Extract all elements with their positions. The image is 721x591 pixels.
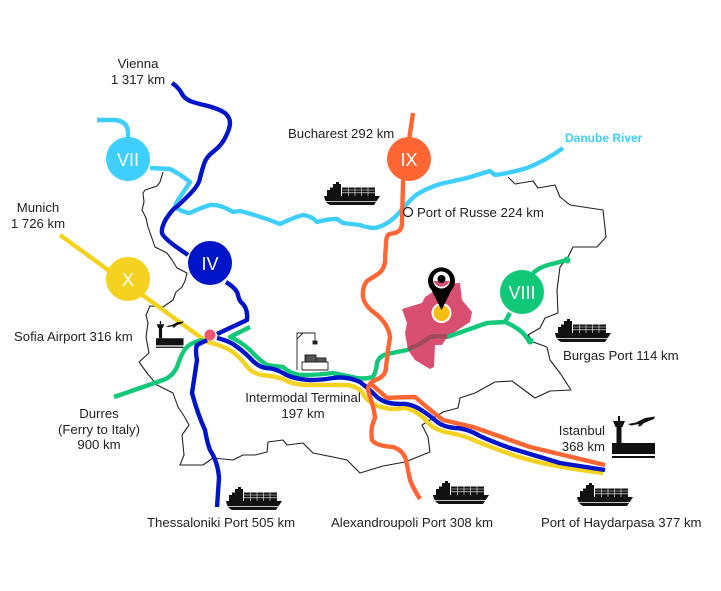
label: Durres: Durres xyxy=(79,406,119,421)
Sofia marker xyxy=(204,330,216,340)
label: Port of Russe: Port of Russe 224 km xyxy=(417,205,544,220)
label: Burgas Port: Burgas Port 114 km xyxy=(563,348,679,363)
label: Istanbul: Istanbul xyxy=(559,423,605,438)
icon: location pin xyxy=(428,267,455,323)
icon: intermodal crane xyxy=(297,333,328,370)
label: Thessaloniki Port: Thessaloniki Port 505 km xyxy=(147,515,295,530)
label: Durres: 900 km xyxy=(77,437,121,452)
badge IV: IV xyxy=(201,254,219,274)
region: highlighted province xyxy=(402,283,472,369)
Port of Russe marker xyxy=(404,208,412,216)
icon: ship Haydarpasa xyxy=(577,483,633,506)
badge IV xyxy=(188,241,232,285)
route VIII: green corridor xyxy=(114,256,570,397)
label: Vienna: 1 317 km xyxy=(111,72,165,87)
route VII: Danube River xyxy=(97,120,563,228)
label: Danube River: Danube River xyxy=(565,131,643,145)
icon: airport Sofia xyxy=(156,321,184,348)
route IX: orange corridor xyxy=(363,113,605,499)
badge IX: IX xyxy=(400,150,418,170)
label: Munich: Munich xyxy=(17,200,59,215)
icon: ship Black Sea north xyxy=(324,182,380,205)
label: Intermodal Terminal: 197 km xyxy=(281,406,325,421)
label: Alexandroupoli Port: Alexandroupoli Port 308 km xyxy=(331,515,493,530)
icon: ship Alexandroupoli xyxy=(433,481,489,504)
route segment: darkened green over province xyxy=(408,336,447,349)
badge X xyxy=(106,257,150,301)
badge VII: VII xyxy=(117,150,139,170)
label: Sofia Airport: Sofia Airport 316 km xyxy=(14,329,133,344)
label: Intermodal Terminal: Intermodal Terminal xyxy=(245,390,361,405)
badge X: X xyxy=(122,270,134,290)
label: Munich: 1 726 km xyxy=(11,216,65,231)
label: Port of Haydarpasa: Port of Haydarpasa 377 km xyxy=(541,515,702,530)
route IV: blue corridor xyxy=(162,83,605,507)
label: Bucharest: Bucharest 292 km xyxy=(288,126,394,141)
country border xyxy=(139,172,606,473)
badge VII xyxy=(106,137,150,181)
badge VIII: VIII xyxy=(508,283,536,303)
route X: yellow corridor xyxy=(60,235,603,473)
label: Vienna: Vienna xyxy=(118,56,159,71)
badge VIII xyxy=(500,270,544,314)
label: Istanbul: 368 km xyxy=(562,439,605,454)
icon: ship Burgas xyxy=(555,319,611,342)
badge IX xyxy=(387,137,431,181)
icon: ship Thessaloniki xyxy=(226,487,282,510)
icon: airport Istanbul xyxy=(612,416,655,458)
label: Durres: (Ferry to Italy) xyxy=(58,422,140,437)
